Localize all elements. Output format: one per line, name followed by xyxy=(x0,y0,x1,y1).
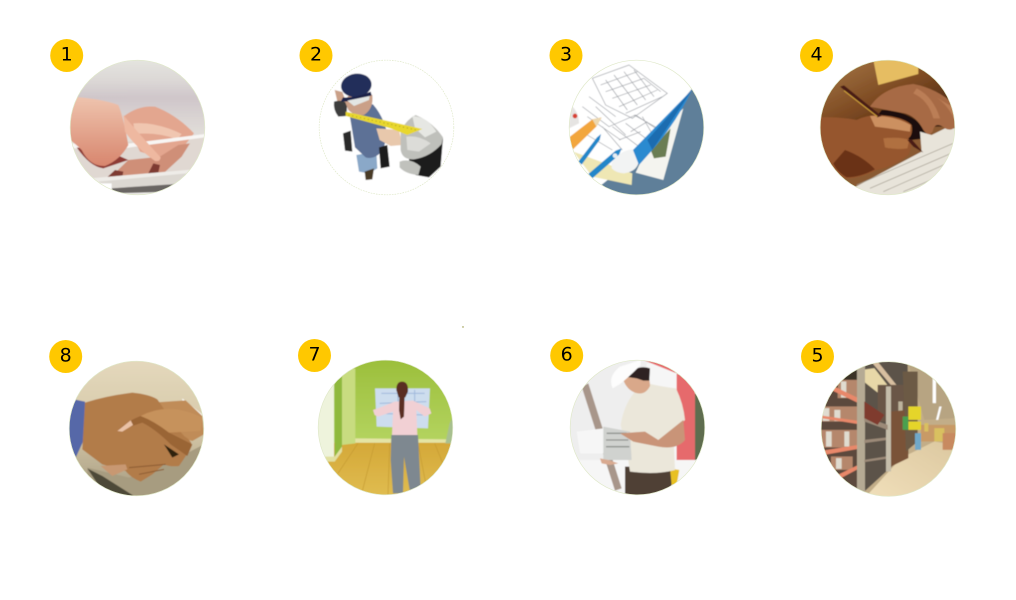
small speck xyxy=(462,326,464,328)
badge 6: 6 xyxy=(561,344,573,366)
badge 6 xyxy=(550,339,583,372)
badge 3 xyxy=(550,39,582,72)
photo: woman holding plans in a green room xyxy=(318,360,453,495)
badge 1 xyxy=(50,39,83,72)
photo: warehouse aisle xyxy=(821,362,956,496)
step 7 xyxy=(298,339,453,495)
step 3 xyxy=(550,39,704,195)
step 1 xyxy=(50,39,205,195)
infographic canvas xyxy=(49,39,956,497)
photo: blueprints and pencils xyxy=(569,60,704,195)
badge 2 xyxy=(300,39,332,72)
photo: builder reading plans xyxy=(570,360,705,495)
photo: finger tapping a tablet xyxy=(70,60,205,195)
badge 5: 5 xyxy=(811,344,824,366)
badge 4: 4 xyxy=(810,44,823,66)
step 4 xyxy=(800,39,955,195)
badge 2: 2 xyxy=(310,44,322,66)
photo: handshake xyxy=(69,361,204,496)
badge 5 xyxy=(801,340,834,373)
photo: hand signing a contract xyxy=(820,60,955,195)
step 8 xyxy=(49,340,204,496)
badge 8 xyxy=(49,340,82,373)
badge 7: 7 xyxy=(308,344,321,366)
badge 8: 8 xyxy=(60,344,72,366)
step 6 xyxy=(550,339,705,495)
badge 4 xyxy=(800,39,833,72)
badge 7 xyxy=(298,339,331,372)
step 5 xyxy=(801,340,956,496)
badge 1: 1 xyxy=(61,44,73,66)
photo: worker holding a tape measure xyxy=(319,60,454,195)
step 2 xyxy=(300,39,454,195)
badge 3: 3 xyxy=(560,44,572,66)
